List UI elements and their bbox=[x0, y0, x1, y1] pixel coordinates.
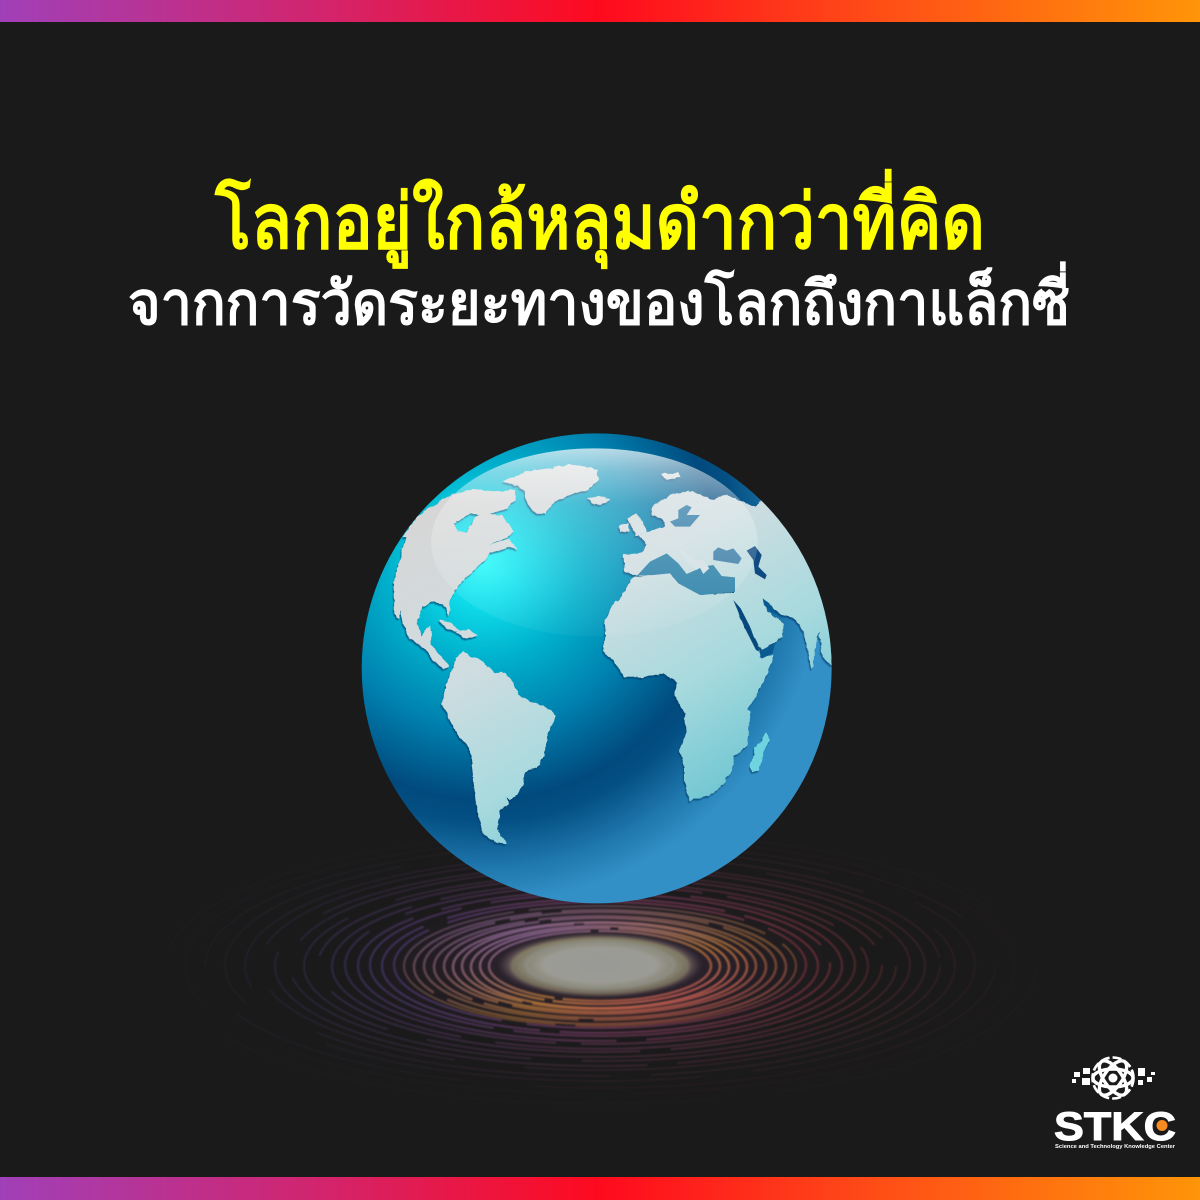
south america bbox=[443, 652, 555, 843]
black sea bbox=[713, 547, 742, 564]
logo pixel dots bbox=[1072, 1068, 1155, 1085]
hispaniola bbox=[457, 630, 477, 637]
red sea bbox=[733, 600, 759, 652]
subheading: white line: จากการวัดระยะทางของโลกถึงกาแล็กซี่ bbox=[128, 261, 1070, 337]
africa bbox=[603, 573, 773, 800]
north america bbox=[394, 490, 517, 668]
logo tagline: Science and Technology Knowledge Center bbox=[1055, 1144, 1176, 1150]
glass highlight bbox=[431, 448, 758, 636]
madagascar bbox=[750, 732, 769, 773]
logo atom icon bbox=[1092, 1056, 1134, 1100]
logo: STKC bbox=[1054, 1056, 1176, 1150]
balkans bbox=[693, 560, 709, 574]
baltic sea bbox=[670, 505, 700, 527]
british isles bbox=[619, 514, 647, 535]
mediterranean sea bbox=[637, 553, 735, 595]
black hole accretion disc bbox=[164, 832, 1036, 1104]
italy bbox=[687, 560, 699, 570]
cuba bbox=[440, 620, 459, 631]
inland seas bbox=[637, 505, 780, 659]
iceland bbox=[588, 497, 610, 503]
continents bbox=[394, 465, 832, 843]
logo orange dot bbox=[1156, 1120, 1168, 1131]
greenland bbox=[503, 465, 598, 513]
svalbard bbox=[662, 473, 680, 479]
persian gulf bbox=[763, 598, 780, 617]
bottom gradient bar bbox=[0, 1177, 1200, 1200]
disc core bbox=[498, 933, 702, 997]
title bbox=[128, 168, 1070, 337]
eurasia bbox=[624, 492, 832, 668]
gulf of aden bbox=[759, 643, 775, 659]
globe ocean bbox=[362, 433, 832, 903]
globe bbox=[362, 433, 832, 903]
logo wordmark: STKC bbox=[1054, 1105, 1176, 1149]
heading: yellow line: โลกอยู่ใกล้หลุมดำกว่าที่คิด bbox=[214, 168, 985, 270]
disc glow bbox=[300, 870, 900, 1060]
caspian sea bbox=[747, 546, 767, 579]
top gradient bar bbox=[0, 0, 1200, 22]
